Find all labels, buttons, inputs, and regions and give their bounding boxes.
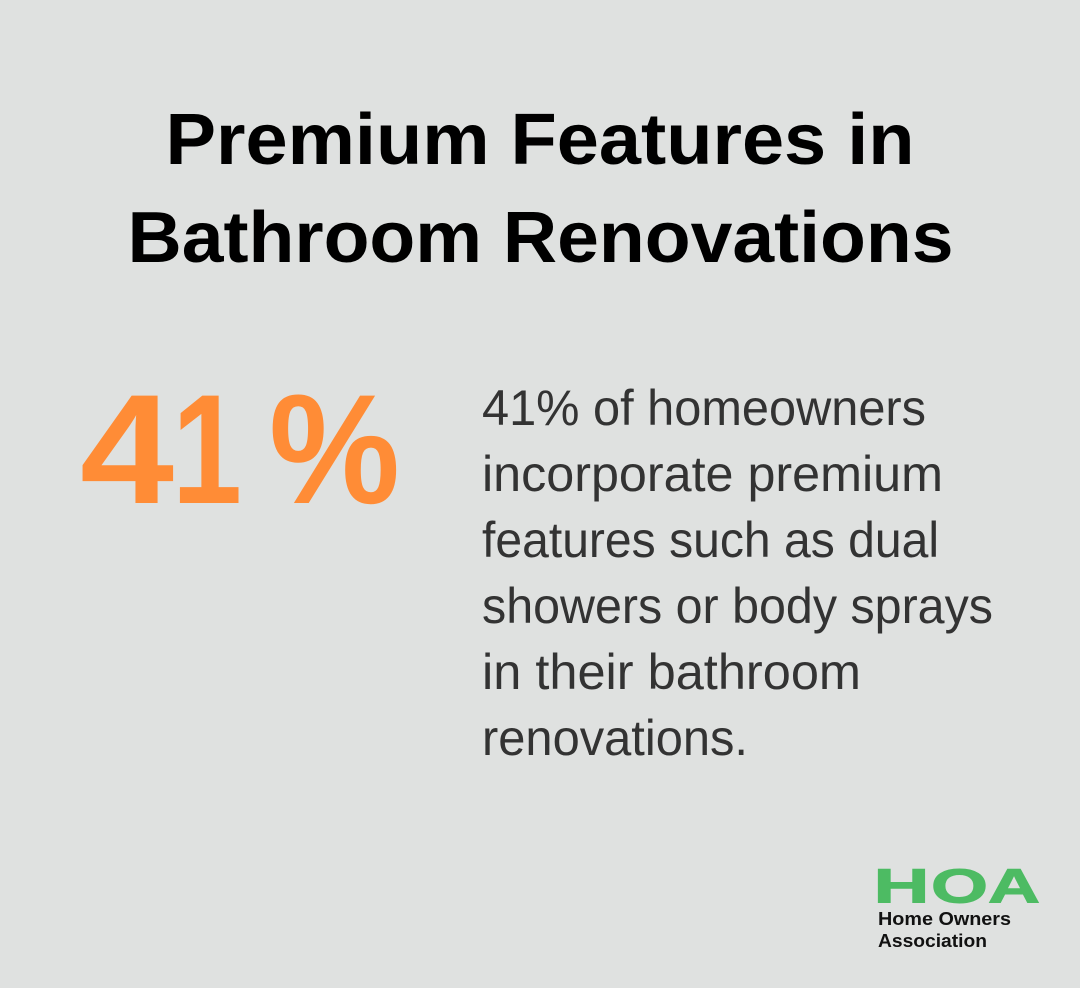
description text: incorporate premium xyxy=(482,446,943,502)
description text: showers or body sprays xyxy=(482,578,993,634)
big statistic: 41%: 4 xyxy=(80,363,174,537)
logo mark: HOA: O xyxy=(931,860,988,914)
big statistic: 41%: % xyxy=(269,363,400,537)
logo mark: HOA: H xyxy=(874,860,930,914)
logo wordmark: Association xyxy=(878,931,987,951)
title xyxy=(128,100,954,278)
logo mark: HOA: A xyxy=(988,860,1040,914)
big statistic: 41% xyxy=(80,363,400,537)
description text: 41% of homeowners xyxy=(482,380,926,436)
logo wordmark xyxy=(878,909,1011,951)
logo wordmark: Home Owners xyxy=(878,909,1011,929)
logo mark: HOA xyxy=(874,860,1040,914)
logo: Home Owners Association xyxy=(874,860,1040,951)
description text xyxy=(482,380,993,766)
big statistic: 41%: 1 xyxy=(172,363,242,537)
description text: features such as dual xyxy=(482,512,939,568)
description text: renovations. xyxy=(482,710,748,766)
description text: in their bathroom xyxy=(482,644,861,700)
title: Bathroom Renovations xyxy=(128,198,954,278)
title: Premium Features in xyxy=(166,100,914,180)
